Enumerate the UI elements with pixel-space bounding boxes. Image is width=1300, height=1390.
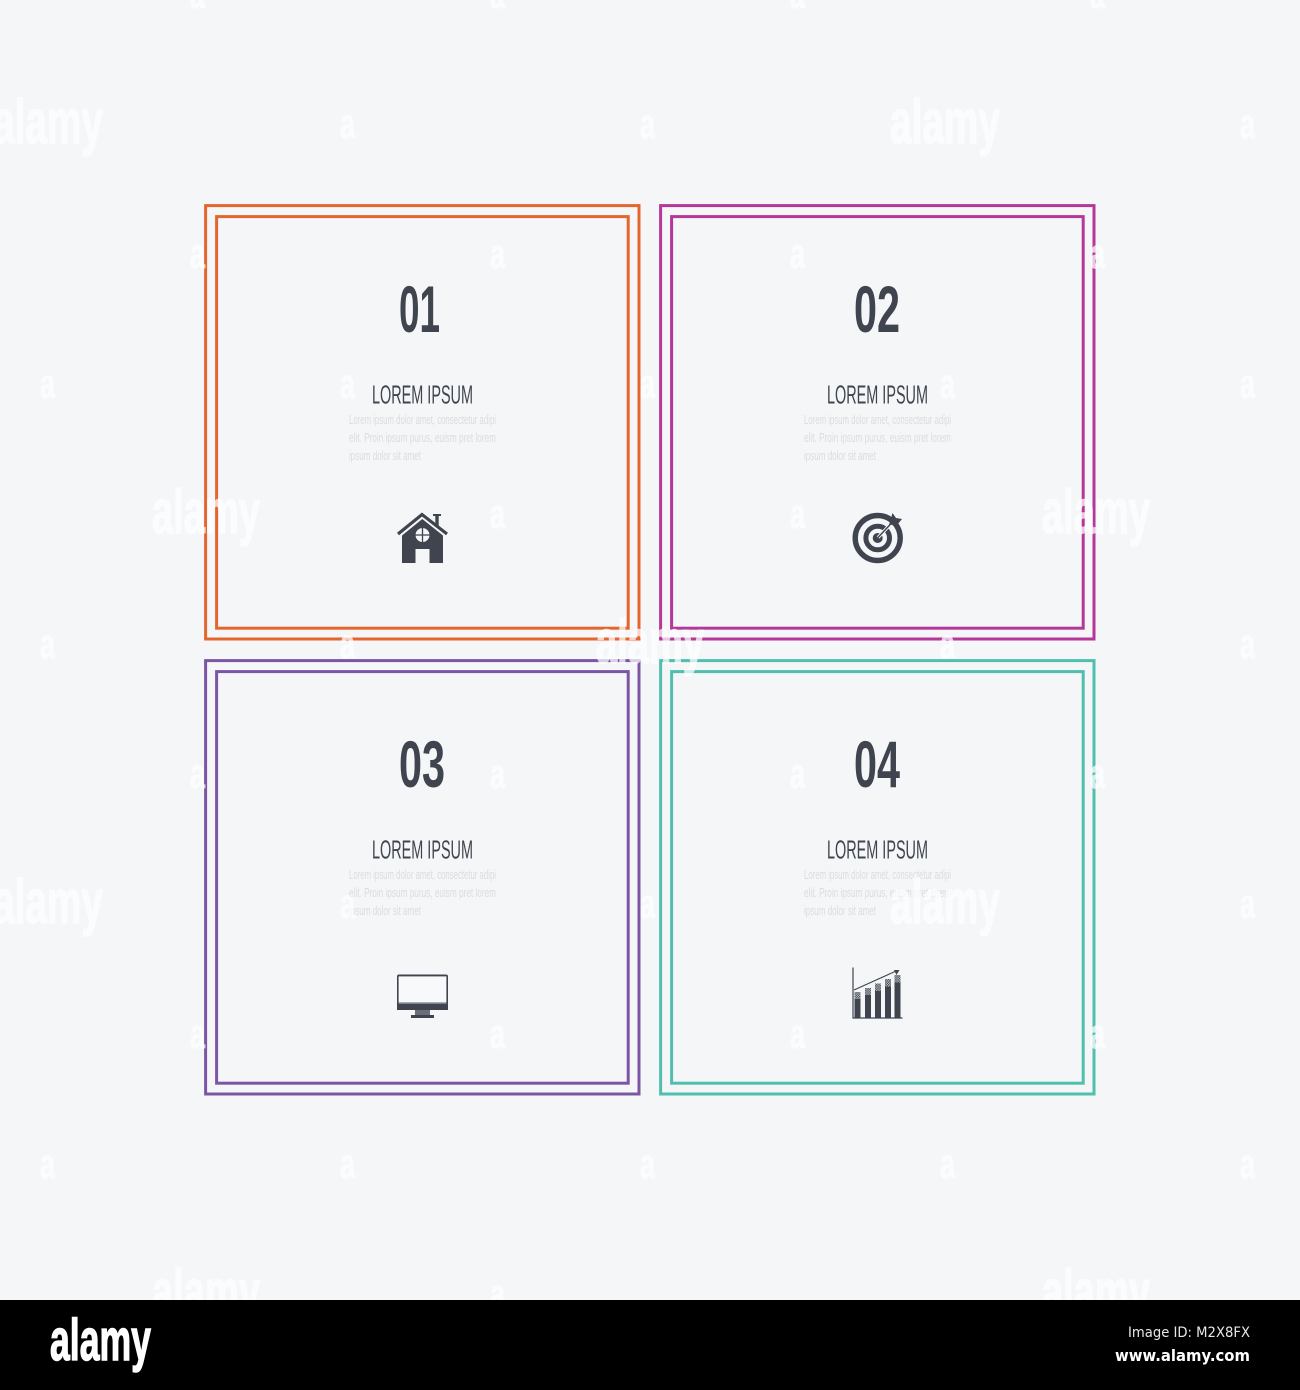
panel: 01 orange [206,206,639,639]
double frame: orange [206,206,639,639]
number 03: 03 [399,727,445,801]
watermark overlay: a [340,360,355,407]
watermark overlay: a [1240,620,1255,667]
body text 04 [804,868,951,918]
watermark overlay: a [190,230,205,277]
watermark overlay: a [940,620,955,667]
watermark overlay: a [790,750,805,797]
icon: monitor [397,974,448,1018]
body text 03: ipsum dolor sit amet [349,904,421,918]
heading 03: LOREM IPSUM [372,834,473,864]
heading 02: LOREM IPSUM [827,380,928,410]
number 04: 04 [854,727,900,801]
watermark overlay: a [190,750,205,797]
watermark overlay: a [790,1010,805,1057]
watermark overlay: alamy [890,868,1000,937]
body text 04: Lorem ipsum dolor amet, consectetur adipi [804,868,951,882]
watermark overlay: a [1240,100,1255,147]
watermark overlay: a [340,100,355,147]
watermark overlay: a [490,1270,505,1317]
body text 02: ipsum dolor sit amet [804,449,876,463]
watermark overlay: a [640,880,655,927]
body text 02: elit. Proin ipsum purus, euism pret lorem [804,431,951,445]
body text 04: elit. Proin ipsum purus, euism pret lorem [804,886,951,900]
watermark overlay: a [940,1140,955,1187]
body text 03: Lorem ipsum dolor amet, consectetur adipi [349,868,496,882]
watermark overlay: a [490,230,505,277]
website: www.alamy.com [1115,1346,1250,1365]
body text 01: ipsum dolor sit amet [349,449,421,463]
watermark overlay: a [340,620,355,667]
body text 03: elit. Proin ipsum purus, euism pret lorem [349,886,496,900]
watermark overlay: a [640,1140,655,1187]
body text 01 [349,413,496,463]
watermark overlay: alamy [890,88,1000,157]
watermark overlay: a [1240,880,1255,927]
watermark overlay: a [1090,230,1105,277]
number 01: 01 [399,272,440,346]
watermark overlay: a [1090,750,1105,797]
heading 04: LOREM IPSUM [827,834,928,864]
double frame: purple [206,661,639,1094]
watermark overlay: a [40,620,55,667]
icon: house [398,514,447,563]
watermark overlay: a [940,360,955,407]
body text 04: ipsum dolor sit amet [804,904,876,918]
image id: Image ID: M2X8FX [1128,1325,1250,1341]
watermark overlay: a [490,1010,505,1057]
body text 02 [804,413,951,463]
watermark overlay: alamy [596,608,704,677]
body text 01: Lorem ipsum dolor amet, consectetur adipi [349,413,496,427]
watermark overlay: a [490,750,505,797]
double frame: magenta [661,206,1094,639]
number 02: 02 [854,272,900,346]
watermark overlay: alamy [152,1258,260,1327]
watermark overlay: a [640,360,655,407]
watermark overlay: a [340,1140,355,1187]
body text 02: Lorem ipsum dolor amet, consectetur adipi [804,413,951,427]
watermark overlay: a [490,490,505,537]
icon: growth bar chart [853,968,902,1018]
watermark overlay: a [40,1140,55,1187]
double frame: teal [661,661,1094,1094]
footer logo: alamy [50,1308,151,1373]
watermark overlay: a [790,490,805,537]
watermark overlay: a [1090,1010,1105,1057]
watermark overlay: a [640,100,655,147]
watermark overlay: alamy [1042,1258,1150,1327]
body text 01: elit. Proin ipsum purus, euism pret lorem [349,431,496,445]
panel: 03 purple [206,661,639,1094]
watermark overlay: a [1240,360,1255,407]
watermark overlay: alamy [152,478,260,547]
watermark overlay: a [790,230,805,277]
body text 03 [349,868,496,918]
panel: 02 magenta [661,206,1094,639]
watermark overlay: a [1240,1140,1255,1187]
footer bar [0,1300,1300,1390]
watermark overlay: a [190,1010,205,1057]
panel: 04 teal [661,661,1094,1094]
icon: target with arrow [855,513,902,560]
watermark overlay: a [40,360,55,407]
watermark overlay: alamy [1042,478,1150,547]
watermark overlay: a [340,880,355,927]
heading 01: LOREM IPSUM [372,380,473,410]
